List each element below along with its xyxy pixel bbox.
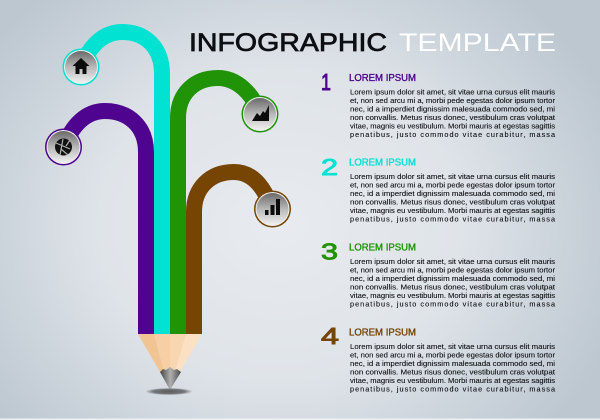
body 3 [350,257,556,308]
body 3: vitae, magnis eu vestibulum. Morbi mauris at egestas sagittis [350,291,555,300]
pencil shadow [146,388,192,395]
icon: home button [62,48,100,86]
title: TEMPLATE [399,29,556,57]
body 4 [350,342,556,394]
section 1 [321,69,556,139]
section 2 [321,154,556,224]
section 3 [321,238,556,308]
number 2: 2 [321,154,338,180]
body 4: nec, id a imperdiet dignissim malesuada commodo sed, mi [350,359,555,368]
icon: area chart button [242,96,278,132]
heading 4: LOREM IPSUM [349,328,416,338]
body 3: nec, id a imperdiet dignissim malesuada commodo sed, mi [350,274,555,283]
section 4 [321,323,556,394]
body 1: nec, id a imperdiet dignissim malesuada commodo sed, mi [350,104,555,114]
heading 3: LOREM IPSUM [349,242,416,254]
title: INFOGRAPHIC [189,29,387,57]
body 4: Lorem ipsum dolor sit amet, sit vitae urna cursus elit mauris [350,342,555,351]
body 2: nec, id a imperdiet dignissim malesuada commodo sed, mi [350,189,555,198]
body 4: vitae, magnis eu vestibulum. Morbi mauris at egestas sagittis [350,376,555,385]
pencil wood [138,334,202,372]
heading 1: LOREM IPSUM [349,73,416,84]
body 3: non convallis. Metus risus donec, vestibulum cras volutpat [350,282,555,292]
heading 2: LOREM IPSUM [349,158,416,168]
number 4: 4 [321,323,339,349]
branch: cyan [81,32,162,334]
body 1 [350,88,556,139]
icon: globe button [45,128,82,166]
body 1: penatibus, justo commodo vitae curabitur, massa [350,130,556,139]
body 4: penatibus, justo commodo vitae curabitur, massa [350,384,556,394]
pencil lead [160,367,181,390]
icon: bar chart button [254,190,291,228]
body 3: penatibus, justo commodo vitae curabitur, massa [350,300,556,308]
body 2: non convallis. Metus risus donec, vestibulum cras volutpat [350,198,555,206]
body 2: penatibus, justo commodo vitae curabitur, massa [350,214,556,224]
body 2 [350,172,556,224]
number 1: 1 [321,69,331,95]
number 3: 3 [321,238,338,264]
body 3: et, non sed arcu mi a, morbi pede egestas dolor ipsum tortor [350,266,556,274]
body 4: et, non sed arcu mi a, morbi pede egestas dolor ipsum tortor [350,350,556,360]
body 4: non convallis. Metus risus donec, vestibulum cras volutpat [350,368,555,376]
body 1: et, non sed arcu mi a, morbi pede egestas dolor ipsum tortor [350,96,556,105]
body 1: Lorem ipsum dolor sit amet, sit vitae urna cursus elit mauris [350,88,555,96]
body 1: non convallis. Metus risus donec, vestibulum cras volutpat [350,113,555,122]
body 2: vitae, magnis eu vestibulum. Morbi mauris at egestas sagittis [350,206,555,215]
pencil illustration [64,32,272,395]
body 2: et, non sed arcu mi a, morbi pede egestas dolor ipsum tortor [350,180,556,190]
branch: green [178,78,260,334]
body 2: Lorem ipsum dolor sit amet, sit vitae urna cursus elit mauris [350,172,555,181]
body 3: Lorem ipsum dolor sit amet, sit vitae urna cursus elit mauris [350,257,555,266]
title [189,29,556,57]
body 1: vitae, magnis eu vestibulum. Morbi mauris at egestas sagittis [350,122,555,130]
branch: brown [194,172,272,334]
branch: purple [64,111,146,334]
